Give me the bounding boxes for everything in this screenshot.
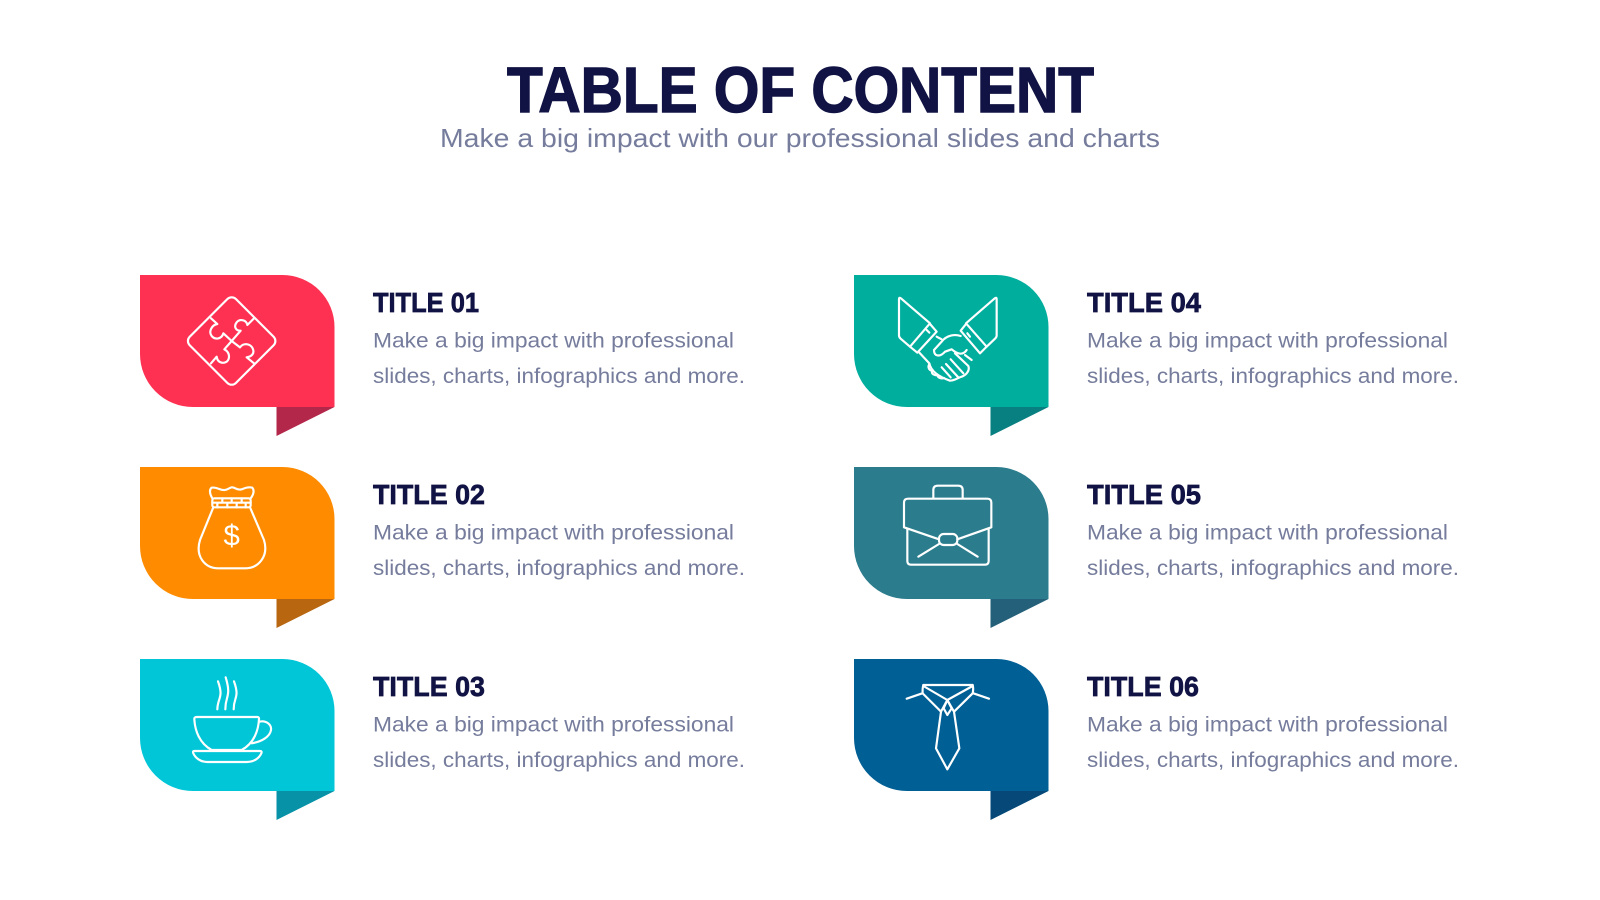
text 01 line 2: slides, charts, infographics and more. (373, 364, 745, 388)
icon: money bag (199, 487, 265, 568)
text 05: Make a big impact with professional (1087, 520, 1448, 544)
icon: briefcase (904, 486, 991, 565)
badge fold 06 (990, 791, 1048, 820)
panel: item 03 (140, 659, 745, 820)
badge fold 03 (276, 791, 334, 820)
badge 03 (140, 659, 334, 791)
badge 01 (140, 275, 334, 407)
text 02 line 2: slides, charts, infographics and more. (373, 556, 745, 580)
icon: money bag: $ (224, 520, 240, 553)
text 05 line 2: slides, charts, infographics and more. (1087, 556, 1459, 580)
heading 05: TITLE 05 (1087, 479, 1201, 510)
text 04: Make a big impact with professional (1087, 328, 1448, 352)
icon: puzzle (185, 295, 278, 387)
title: TABLE OF CONTENT (507, 54, 1094, 126)
panel: item 05 (854, 467, 1459, 628)
text 02: Make a big impact with professional (373, 520, 734, 544)
text 01: Make a big impact with professional (373, 328, 734, 352)
panel: item 06 (854, 659, 1459, 820)
text 03 line 2: slides, charts, infographics and more. (373, 748, 745, 772)
badge fold 02 (276, 599, 334, 628)
badge 05 (854, 467, 1048, 599)
heading 03: TITLE 03 (373, 671, 485, 702)
heading 06: TITLE 06 (1087, 671, 1199, 702)
heading 02: TITLE 02 (373, 479, 485, 510)
icon: necktie (907, 685, 989, 769)
badge fold 01 (276, 407, 334, 436)
panel: item 01 (140, 275, 745, 436)
icon: coffee cup (193, 677, 271, 762)
subtitle: Make a big impact with our professional slides and charts (440, 123, 1160, 153)
text 03: Make a big impact with professional (373, 712, 734, 736)
icon: handshake (899, 298, 997, 381)
badge 02 (140, 467, 334, 599)
badge fold 04 (990, 407, 1048, 436)
panel: item 02 (140, 467, 745, 628)
text 06 line 2: slides, charts, infographics and more. (1087, 748, 1459, 772)
badge 06 (854, 659, 1048, 791)
text 04 line 2: slides, charts, infographics and more. (1087, 364, 1459, 388)
heading 01: TITLE 01 (373, 287, 479, 318)
panel: item 04 (854, 275, 1459, 436)
heading 04: TITLE 04 (1087, 287, 1201, 318)
badge 04 (854, 275, 1048, 407)
text 06: Make a big impact with professional (1087, 712, 1448, 736)
badge fold 05 (990, 599, 1048, 628)
